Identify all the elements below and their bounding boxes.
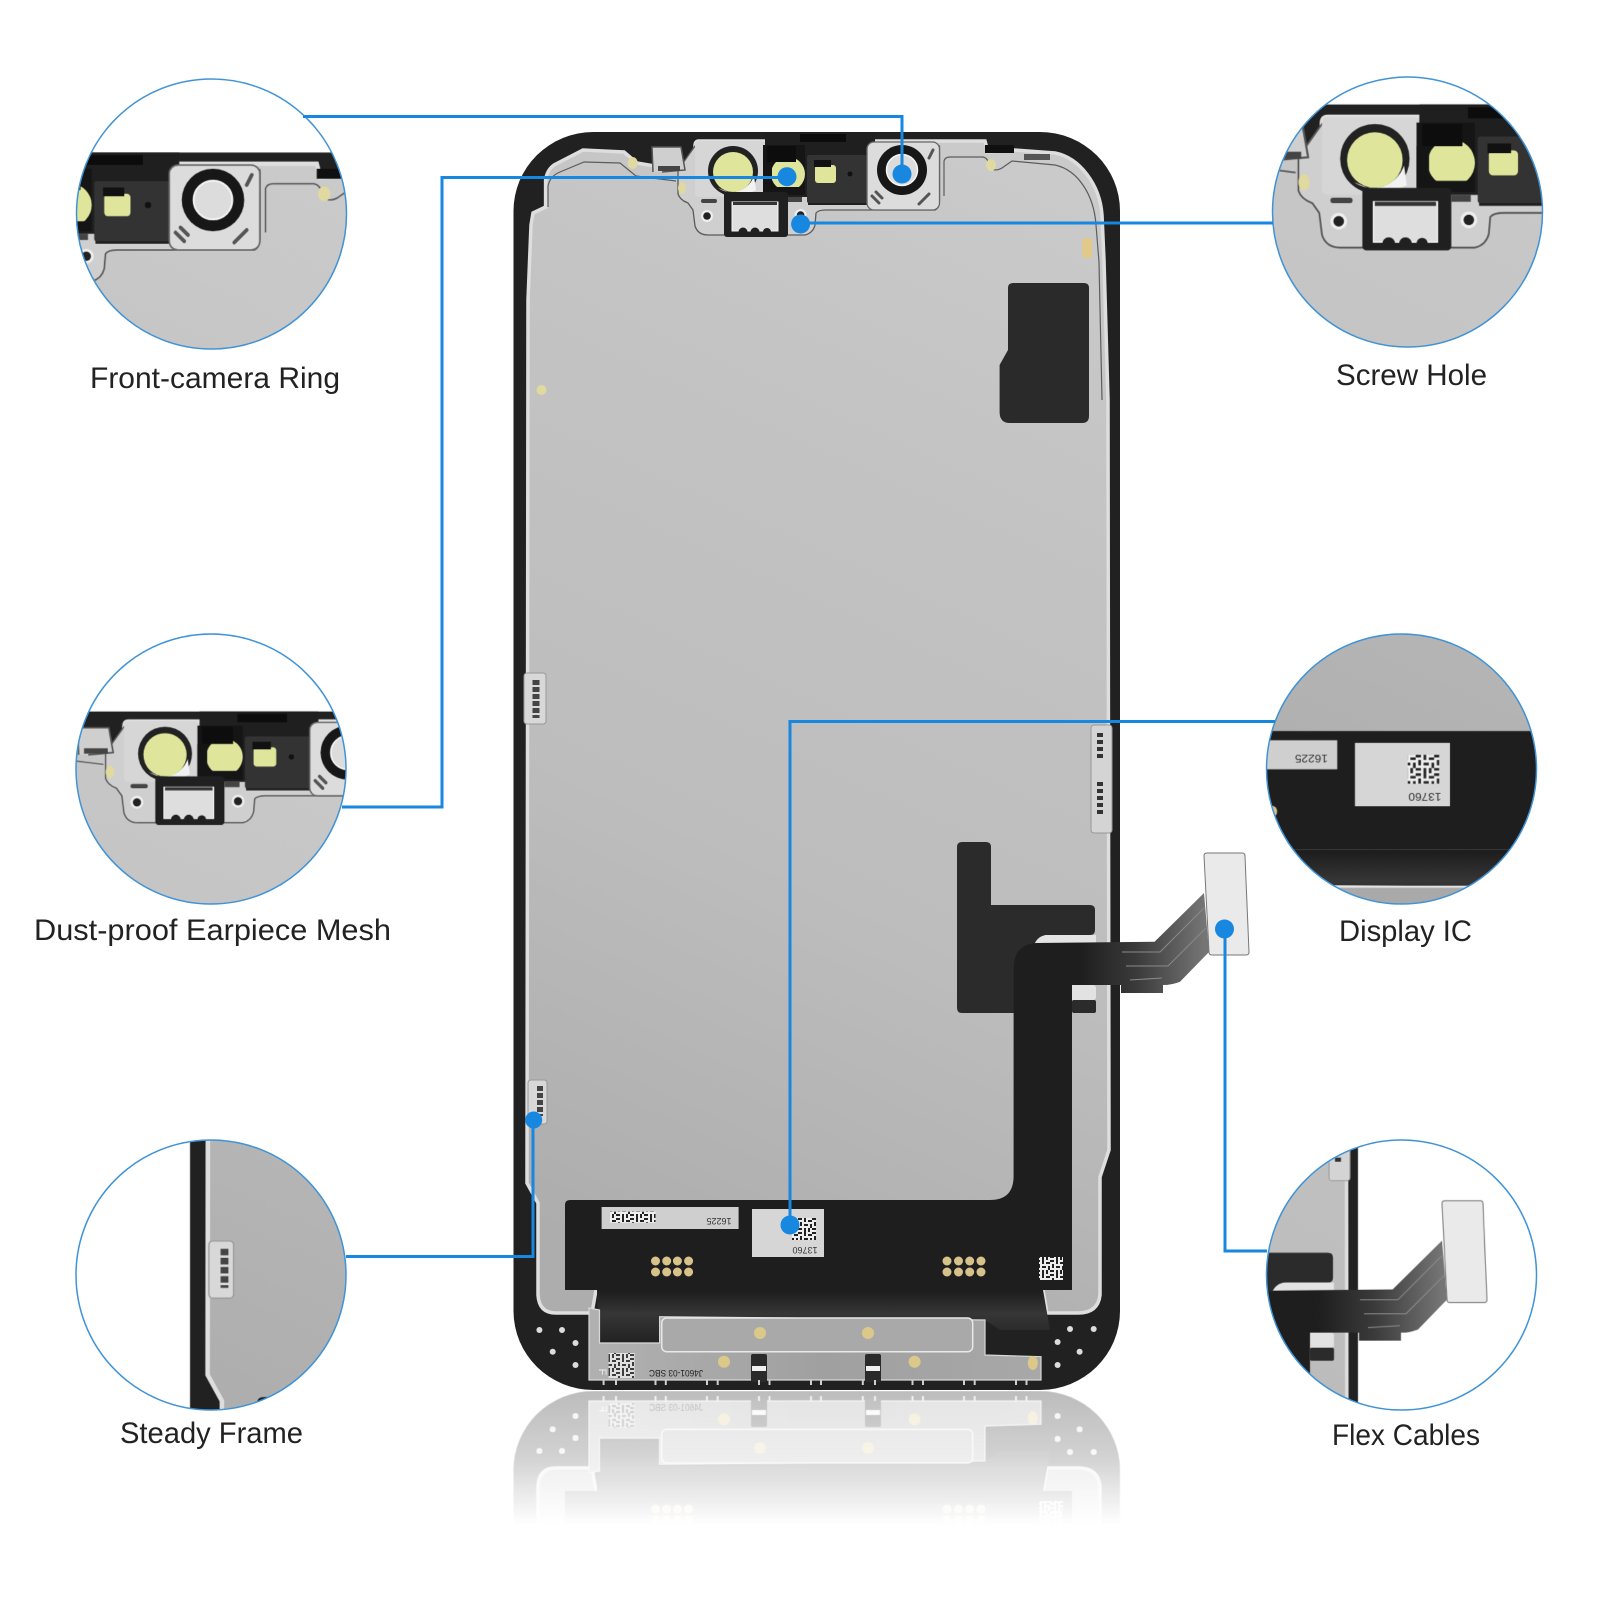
speaker mesh xyxy=(724,192,788,237)
upper left clip xyxy=(652,147,685,172)
label: front-camera ring: Front-camera Ring xyxy=(90,362,340,395)
phone screen assembly xyxy=(514,132,1249,1390)
black bezel xyxy=(514,132,1120,1390)
label: dust-proof earpiece mesh: Dust-proof Earpiece Mesh xyxy=(34,914,391,947)
panel: steady frame zoom xyxy=(76,1140,346,1410)
barcode label two xyxy=(752,1209,824,1257)
corner screw dots xyxy=(536,1326,1097,1368)
proximity sensor block xyxy=(807,155,867,203)
flex traces xyxy=(1122,908,1206,980)
metal back plate xyxy=(527,141,1109,1313)
top black strip xyxy=(765,132,875,205)
plate teeth xyxy=(604,1380,1026,1385)
label: steady frame: Steady Frame xyxy=(120,1417,303,1450)
leader: earpiece mesh xyxy=(342,167,796,807)
side clips xyxy=(524,673,1112,1124)
panel: front-camera ring zoom xyxy=(76,79,346,349)
raised steel bar xyxy=(662,1318,973,1352)
sensor hole xyxy=(848,172,852,176)
barcode label two: 13760 xyxy=(792,1245,818,1255)
earpiece and camera module xyxy=(678,132,940,237)
panel: display IC zoom xyxy=(1266,634,1536,904)
steel matrix code xyxy=(609,1353,635,1378)
black adhesive patch xyxy=(1000,283,1089,423)
folded flex shadow band xyxy=(597,1290,1050,1343)
leader: front-camera ring xyxy=(303,116,912,184)
upper bracket xyxy=(695,141,765,197)
display flex cable xyxy=(565,893,1209,1290)
camera ring xyxy=(877,145,927,195)
adhesive dots xyxy=(536,157,1092,395)
barcode label one xyxy=(602,1207,739,1229)
engraved part number: J4601-03 SBC xyxy=(649,1367,703,1378)
gold contact pads xyxy=(651,1256,986,1276)
leader: flex cables xyxy=(1215,920,1267,1251)
label: screw hole: Screw Hole xyxy=(1336,359,1487,392)
main earpiece sensor xyxy=(708,146,758,196)
bracket flange xyxy=(678,146,940,235)
panel: flex cables zoom xyxy=(1266,1140,1536,1410)
camera bracket xyxy=(867,142,940,210)
phone reflection xyxy=(513,1391,1120,1512)
flex silver stiffener xyxy=(1204,853,1249,955)
barcode label one: 16225 xyxy=(706,1216,732,1226)
leader: screw hole xyxy=(791,214,1273,234)
second sensor xyxy=(763,145,805,195)
label: display IC: Display IC xyxy=(1339,915,1472,948)
silver gaps by the flex xyxy=(1034,935,1096,945)
steel shield plate: F xyxy=(596,1369,608,1376)
steel shield plate xyxy=(589,1308,1041,1385)
leader: display IC xyxy=(780,722,1275,1234)
screw holes xyxy=(701,210,713,222)
corner matrix code xyxy=(1039,1257,1063,1280)
steel clips xyxy=(751,1354,767,1382)
leader: steady frame xyxy=(346,1112,542,1256)
panel: screw hole zoom xyxy=(1272,77,1542,347)
upper right clip xyxy=(1024,154,1050,160)
panel: earpiece mesh zoom xyxy=(76,634,346,904)
steel gold dots xyxy=(718,1327,1038,1370)
label: flex cables: Flex Cables xyxy=(1332,1419,1480,1452)
sensor yellow pad xyxy=(815,165,836,183)
rim inner lines xyxy=(548,157,1102,400)
T-shaped black shield xyxy=(957,842,1095,1013)
